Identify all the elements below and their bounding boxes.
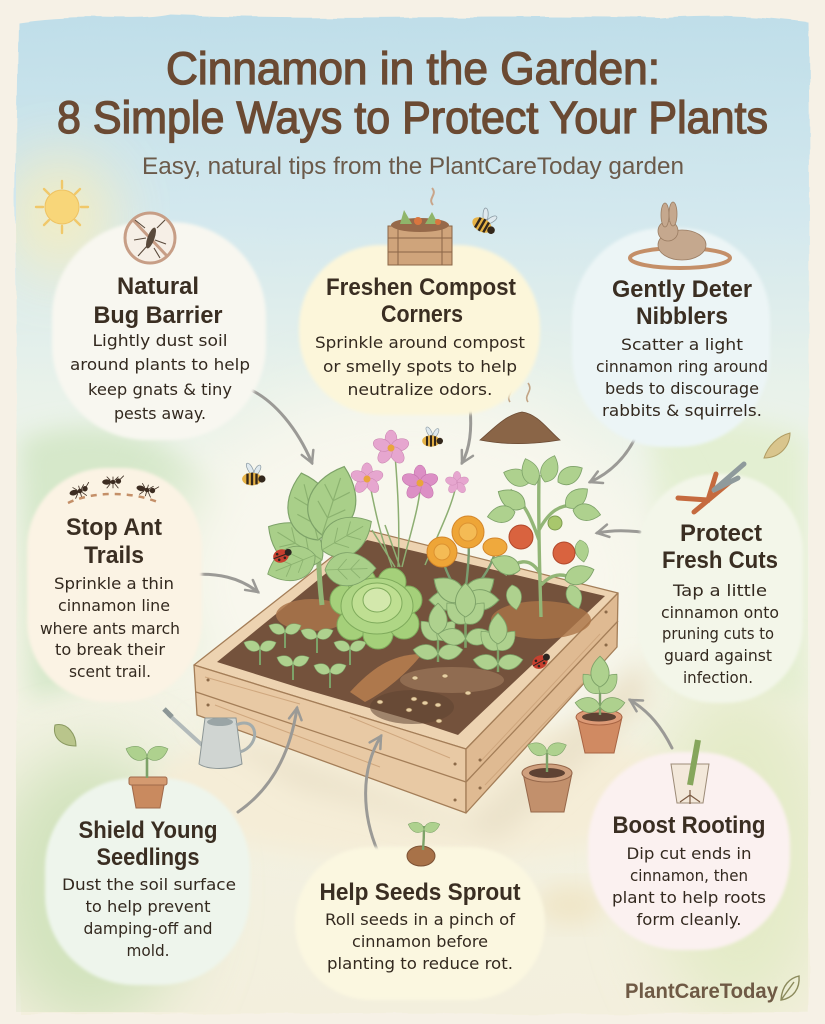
panel: Protect Fresh Cuts: guard against — [664, 646, 772, 665]
wooden bed: back and rim — [194, 530, 618, 813]
panel: Freshen Compost Corners: or smelly spots to help — [323, 357, 517, 376]
panel: Freshen Compost Corners: Sprinkle around compost — [315, 333, 525, 352]
panel: Shield Young Seedlings: Dust the soil surface — [62, 875, 236, 894]
seedlings — [242, 638, 278, 665]
icon: ants — [68, 476, 160, 503]
arrows — [187, 388, 672, 852]
panel: Stop Ant Trails: cinnamon line — [58, 596, 170, 615]
panel: Stop Ant Trails: Stop Ant — [66, 514, 162, 541]
panel: Natural Bug Barrier — [52, 213, 266, 440]
panel: Freshen Compost Corners: Corners — [381, 301, 463, 328]
panel: Help Seeds Sprout: Roll seeds in a pinch of — [325, 910, 515, 929]
panel: Gently Deter Nibblers: Scatter a light — [621, 335, 743, 354]
icon: seedling pot — [124, 743, 170, 808]
young plants — [412, 603, 464, 662]
panel: Gently Deter Nibblers — [572, 202, 770, 447]
brand logo: PlantCareToday — [625, 980, 778, 1003]
watering can — [164, 709, 255, 768]
icon: bee — [470, 205, 503, 238]
panel: Natural Bug Barrier: Bug Barrier — [94, 302, 222, 329]
panel: Boost Rooting: Dip cut ends in — [626, 844, 752, 863]
panel: Stop Ant Trails: where ants march — [40, 619, 180, 638]
panel: Gently Deter Nibblers: rabbits & squirrels. — [602, 401, 762, 420]
compost pile — [480, 383, 560, 444]
ladybug on rim — [530, 651, 553, 672]
panel: Stop Ant Trails: scent trail. — [69, 662, 151, 681]
panel: Shield Young Seedlings: damping-off and — [84, 919, 212, 938]
panel: Stop Ant Trails: Trails — [84, 542, 144, 569]
panel: Freshen Compost Corners: neutralize odors. — [348, 380, 492, 399]
panel: Natural Bug Barrier: pests away. — [114, 404, 206, 423]
icon: crossed-out bug — [125, 213, 175, 263]
panel: Natural Bug Barrier: Natural — [117, 273, 199, 300]
cosmos flowers — [350, 430, 470, 567]
title — [57, 43, 768, 143]
panel: Boost Rooting: form cleanly. — [636, 910, 742, 929]
panel: Shield Young Seedlings: mold. — [126, 941, 170, 960]
panel: Protect Fresh Cuts: Protect — [680, 520, 762, 547]
panel: Natural Bug Barrier: around plants to help — [70, 355, 250, 374]
icon: rabbit on cinnamon ring — [630, 202, 730, 268]
icon: falling leaves — [54, 433, 790, 746]
panel: Protect Fresh Cuts: cinnamon onto — [661, 603, 779, 622]
panel: Boost Rooting: Boost Rooting — [612, 812, 766, 839]
panel: Gently Deter Nibblers: Gently Deter — [612, 276, 752, 303]
soil — [217, 540, 605, 735]
icon: sun — [36, 181, 88, 233]
seeds — [377, 674, 471, 723]
panel: Help Seeds Sprout: Help Seeds Sprout — [320, 879, 521, 906]
marigolds — [427, 516, 507, 610]
panel: Protect Fresh Cuts: Tap a little — [672, 581, 767, 600]
icon: sprouting seed — [407, 820, 441, 866]
panel: Shield Young Seedlings: Seedlings — [96, 844, 200, 871]
panel: Help Seeds Sprout: cinnamon before — [352, 932, 488, 951]
raised bed illustration — [190, 427, 650, 840]
icon: pruners — [678, 464, 744, 512]
ground shadow — [190, 660, 650, 840]
panel: Stop Ant Trails: to break their — [55, 640, 165, 659]
title: 8 Simple Ways to Protect Your Plants — [57, 92, 768, 143]
icon: rooting cutting — [671, 740, 709, 804]
panel: Natural Bug Barrier: keep gnats & tiny — [88, 380, 232, 399]
pot: large seedling — [574, 656, 626, 753]
panel: Gently Deter Nibblers: Nibblers — [636, 303, 728, 330]
panel: Boost Rooting: cinnamon, then — [630, 866, 748, 885]
panel: Shield Young Seedlings — [45, 743, 250, 985]
panel: Protect Fresh Cuts: pruning cuts to — [662, 624, 774, 643]
panel: Gently Deter Nibblers: beds to discourage — [605, 379, 759, 398]
panel: Protect Fresh Cuts — [638, 464, 803, 703]
panel: Protect Fresh Cuts: Fresh Cuts — [662, 547, 778, 574]
tomato plant — [486, 453, 602, 617]
panel: Freshen Compost Corners — [299, 188, 540, 415]
panel: Stop Ant Trails — [27, 468, 202, 702]
panel: Help Seeds Sprout: planting to reduce rot. — [327, 954, 513, 973]
panel: Freshen Compost Corners: Freshen Compost — [326, 274, 516, 301]
panel: Natural Bug Barrier: Lightly dust soil — [92, 331, 228, 350]
panel: Gently Deter Nibblers: cinnamon ring around — [596, 357, 768, 376]
icon: compost crate — [388, 188, 452, 265]
pot: small seedling — [522, 739, 572, 812]
title: Cinnamon in the Garden: — [166, 43, 660, 94]
panel: Boost Rooting: plant to help roots — [612, 888, 766, 907]
panel: Help Seeds Sprout — [295, 820, 545, 1000]
panel: Shield Young Seedlings: to help prevent — [86, 897, 210, 916]
beet plant — [258, 459, 381, 605]
ladybug on leaf — [271, 546, 294, 565]
panel: Shield Young Seedlings: Shield Young — [78, 817, 218, 844]
bees — [242, 463, 266, 485]
panel: Boost Rooting — [588, 740, 790, 950]
lettuce — [330, 568, 422, 649]
panel: Protect Fresh Cuts: infection. — [683, 668, 753, 687]
panel: Stop Ant Trails: Sprinkle a thin — [54, 574, 174, 593]
subtitle: Easy, natural tips from the PlantCareToday garden — [142, 153, 684, 180]
